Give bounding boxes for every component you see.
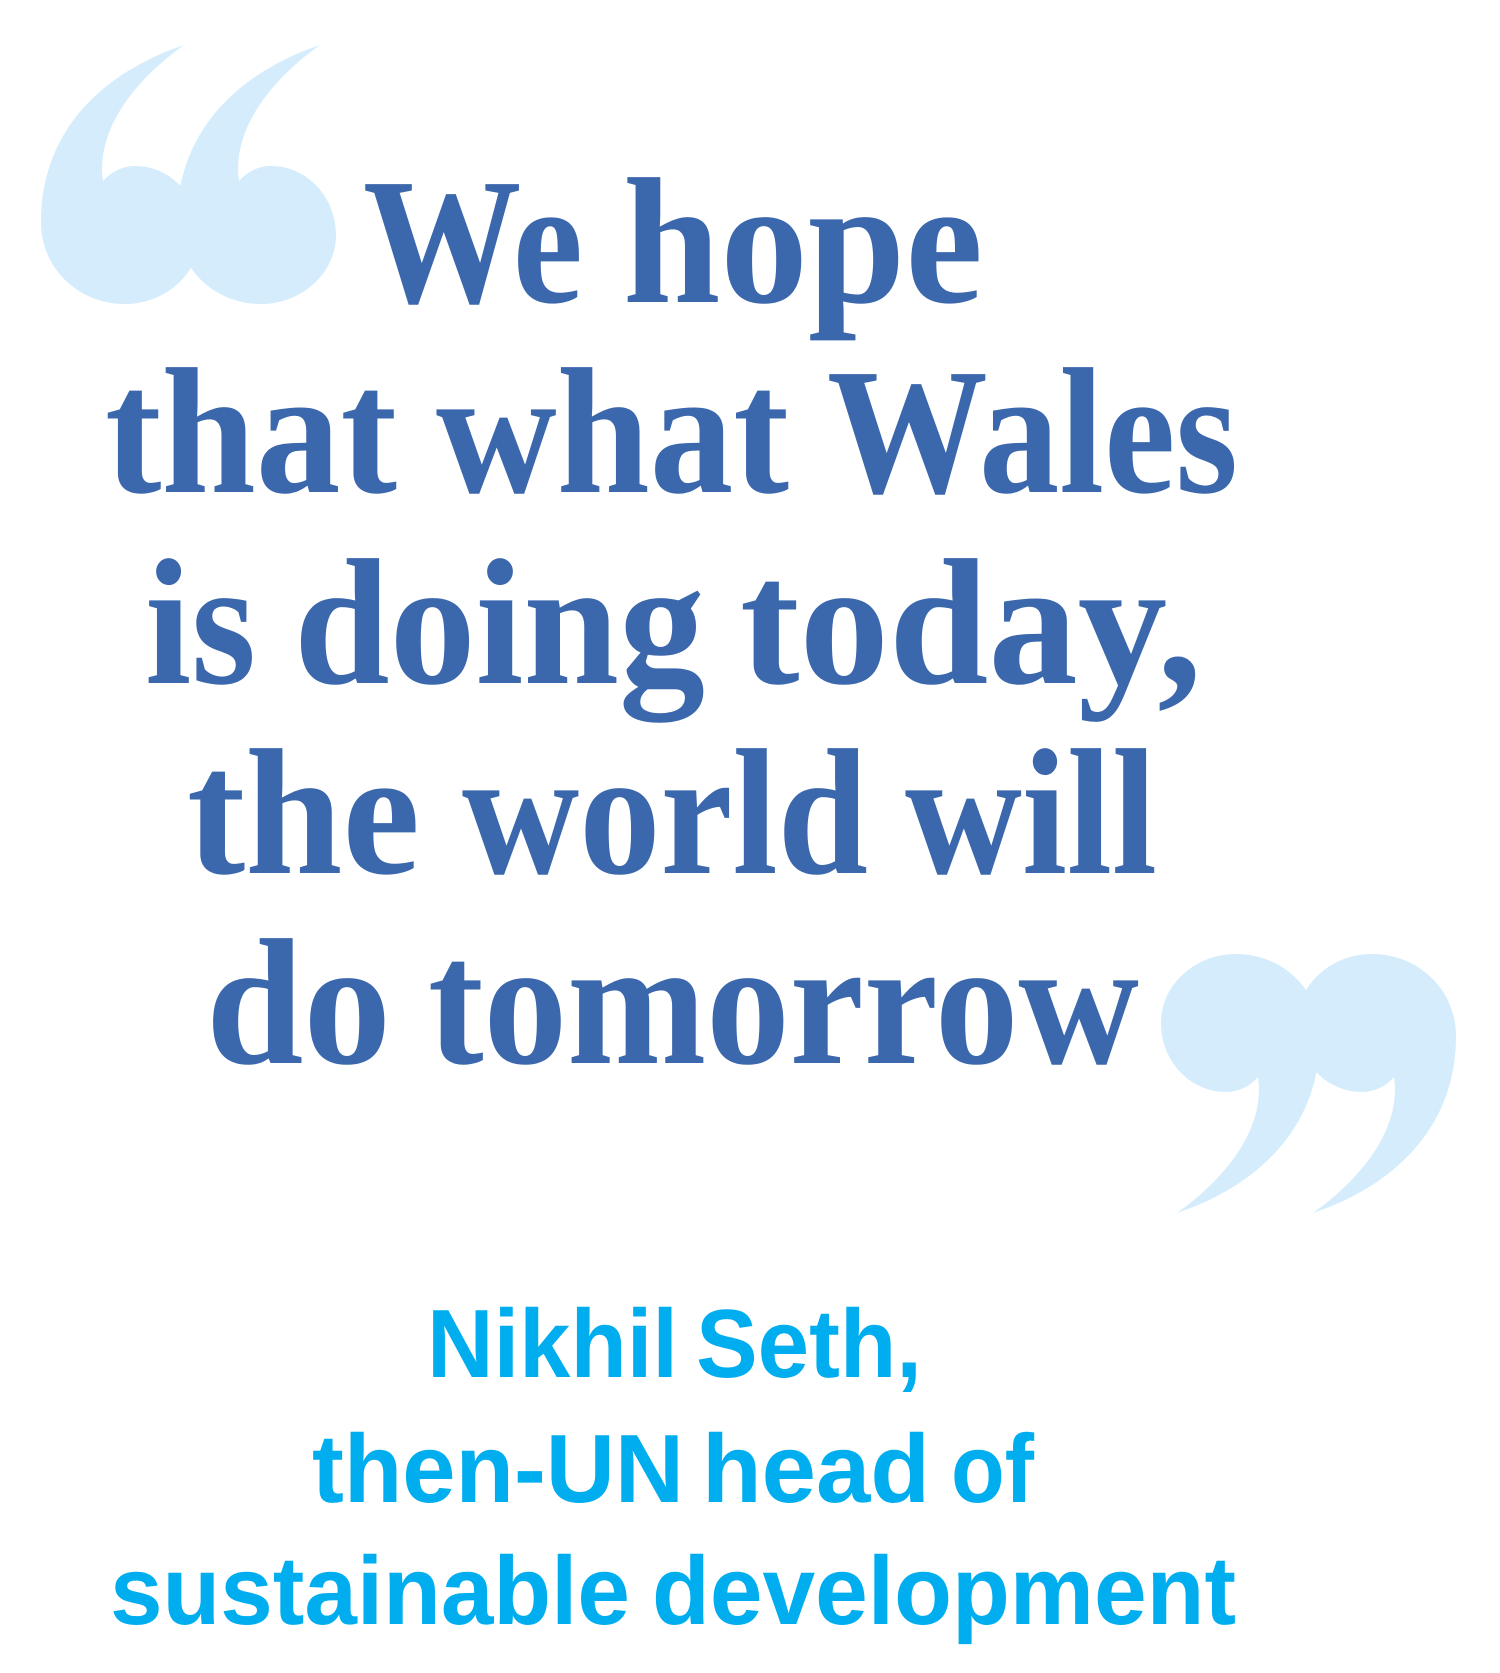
quote line 1: We xyxy=(363,142,583,341)
quote line 2 xyxy=(105,332,1238,531)
attribution role line 2: sustainable xyxy=(110,1536,630,1645)
attribution role line 1: then-UN xyxy=(312,1414,684,1523)
quote line 4: world xyxy=(462,713,868,912)
attribution xyxy=(110,1289,1236,1645)
quote line 2: what xyxy=(436,332,789,531)
quote line 4: will xyxy=(905,713,1157,912)
quote line 3 xyxy=(145,523,1202,723)
attribution role line 2 xyxy=(110,1536,1236,1645)
quote line 5: tomorrow xyxy=(428,903,1139,1102)
attribution name: Nikhil xyxy=(427,1289,678,1398)
icon: opening quotation mark xyxy=(41,45,336,304)
quote line 4 xyxy=(187,713,1157,912)
attribution role line 1 xyxy=(312,1414,1035,1523)
icon: closing quotation mark xyxy=(1161,954,1456,1213)
quote line 2: Wales xyxy=(827,332,1238,531)
quote line 3: doing xyxy=(294,523,705,723)
quote line 1 xyxy=(363,142,983,341)
quote line 2: that xyxy=(105,332,397,531)
quote line 5: do xyxy=(206,903,391,1102)
quote line 3: today, xyxy=(740,523,1202,722)
quote text xyxy=(105,142,1238,1102)
quote line 4: the xyxy=(187,713,420,912)
attribution role line 1: head xyxy=(702,1414,930,1523)
attribution role line 2: development xyxy=(652,1536,1236,1645)
quote line 3: is xyxy=(145,523,256,722)
quote line 1: hope xyxy=(623,142,983,341)
attribution name: Seth, xyxy=(696,1289,922,1398)
attribution role line 1: of xyxy=(951,1414,1035,1523)
attribution name xyxy=(427,1289,922,1398)
